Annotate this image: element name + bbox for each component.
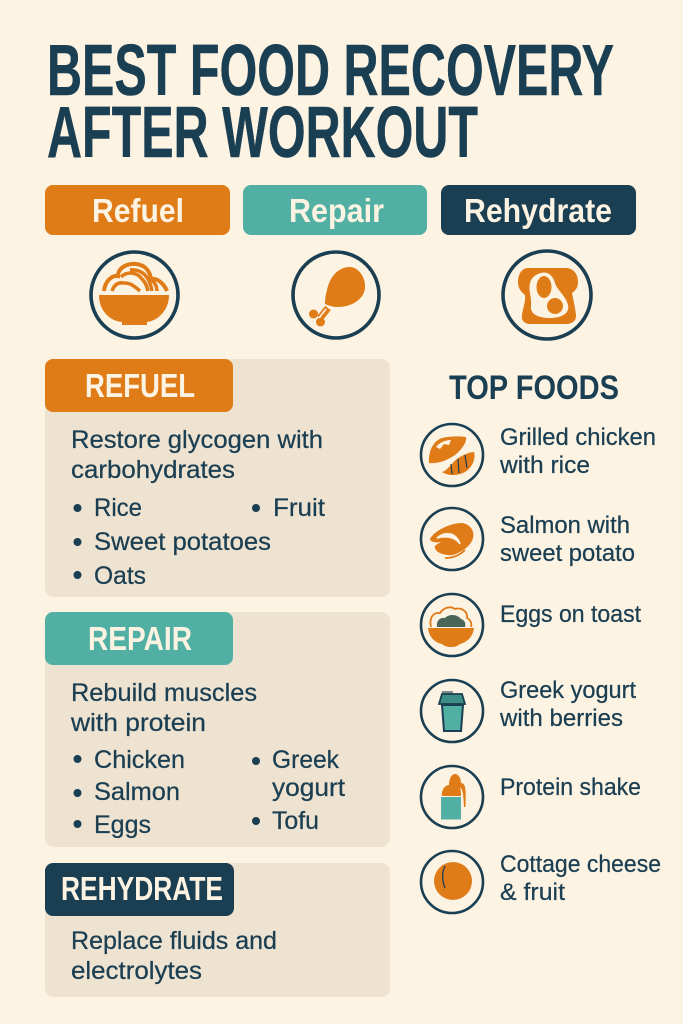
text: greek yogurt with berries: Greek yogurt [500, 677, 636, 704]
button: Refuel: Refuel [92, 192, 184, 229]
top food: cottage cheese and fruit [421, 851, 661, 913]
text: eggs on toast: Eggs on toast [500, 601, 641, 628]
text: repair description: Rebuild muscles [71, 679, 257, 707]
text: rehydrate description: Replace fluids and [71, 927, 277, 955]
title: AFTER WORKOUT [47, 93, 478, 173]
text: refuel description [71, 426, 323, 484]
icon: eggs bowl [421, 594, 483, 656]
icon: noodle bowl [91, 252, 178, 338]
text: salmon with sweet potato: Salmon with [500, 512, 630, 539]
icon: orange fruit [421, 851, 483, 913]
tab: REPAIR: REPAIR [88, 620, 192, 657]
text: repair description [70, 679, 257, 737]
text: greek yogurt with berries [499, 677, 636, 732]
icon: shake [421, 766, 483, 828]
icon: chicken and rice [421, 424, 483, 486]
list: refuel foods: Fruit [273, 494, 325, 522]
text: greek yogurt with berries: with berries [499, 705, 623, 732]
heading: top foods: TOP FOODS [449, 369, 619, 407]
text: repair description: with protein [70, 709, 206, 737]
list: repair foods: Salmon [94, 778, 180, 806]
list: repair foods: Eggs [94, 811, 151, 839]
button: Repair [243, 185, 427, 235]
text: salmon with sweet potato [500, 512, 635, 567]
tab: REFUEL [45, 359, 233, 412]
top food: salmon with sweet potato [421, 508, 635, 570]
text: grilled chicken with rice: Grilled chicken [500, 424, 656, 451]
list: repair foods [74, 746, 345, 839]
button: Rehydrate [441, 185, 636, 235]
text: cottage cheese and fruit: Cottage cheese [500, 851, 661, 878]
icon: chicken drumstick [293, 252, 379, 338]
text: grilled chicken with rice: with rice [499, 452, 590, 479]
panel: repair [45, 612, 390, 847]
list: repair foods: Chicken [94, 746, 185, 774]
text: salmon with sweet potato: sweet potato [500, 540, 635, 567]
text: cottage cheese and fruit: & fruit [500, 879, 565, 906]
icon: egg on toast [503, 251, 591, 339]
list: repair foods: Tofu [272, 807, 319, 835]
tab: REFUEL: REFUEL [85, 367, 195, 404]
list: refuel foods: Oats [94, 562, 146, 590]
text: protein shake: Protein shake [500, 774, 641, 801]
tab: REHYDRATE [45, 863, 234, 916]
text: cottage cheese and fruit [500, 851, 661, 906]
list: refuel foods: Rice [94, 494, 142, 522]
tab: REPAIR [45, 612, 233, 665]
text: grilled chicken with rice [499, 424, 656, 479]
list: repair foods: yogurt [272, 774, 345, 802]
panel: refuel [45, 359, 390, 597]
icon: cup [421, 680, 483, 742]
tab: REHYDRATE: REHYDRATE [61, 870, 223, 907]
top food: grilled chicken with rice [421, 424, 656, 486]
top food: greek yogurt with berries [421, 677, 636, 742]
panel: rehydrate [45, 863, 390, 997]
top food: eggs on toast [421, 594, 641, 656]
text: rehydrate description: electrolytes [71, 957, 202, 985]
button: Refuel [45, 185, 230, 235]
text: refuel description: Restore glycogen with [71, 426, 323, 454]
button: Rehydrate: Rehydrate [464, 192, 612, 229]
text: rehydrate description [71, 927, 277, 985]
list: repair foods: Greek [272, 746, 339, 774]
text: refuel description: carbohydrates [71, 456, 235, 484]
top food: protein shake [421, 766, 641, 828]
list: refuel foods [74, 494, 325, 590]
title [47, 31, 614, 173]
button: Repair: Repair [289, 192, 384, 229]
list: refuel foods: Sweet potatoes [94, 528, 271, 556]
icon: salmon [421, 508, 483, 570]
